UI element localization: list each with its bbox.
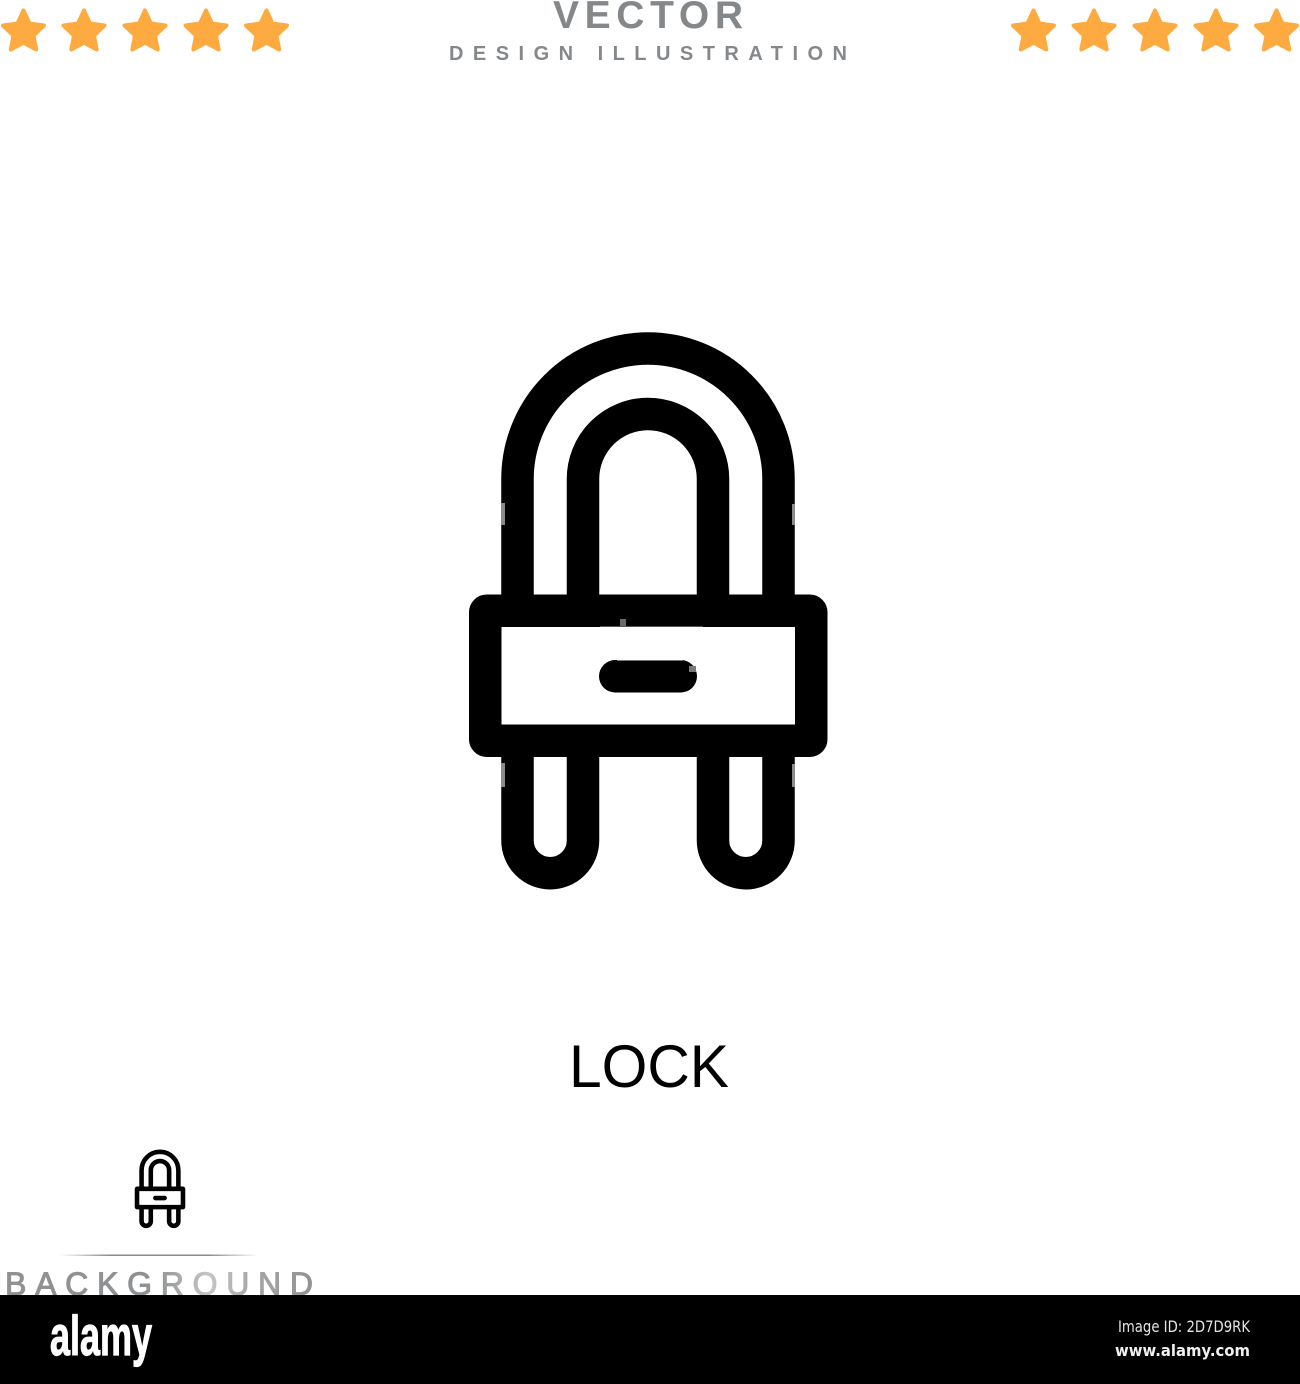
subheading: design illustration: DESIGN ILLUSTRATION bbox=[449, 43, 847, 65]
lock keyhole slot bbox=[599, 660, 697, 692]
divider line under thumbnail bbox=[60, 1254, 258, 1256]
lock inner shackle bbox=[583, 414, 713, 610]
label: background: BACKGROUND bbox=[5, 1266, 313, 1302]
image id: Image ID: 2D7D9RK bbox=[1118, 1317, 1250, 1336]
watermark logo: alamy: alamy bbox=[50, 1304, 152, 1367]
label: lock: LOCK bbox=[569, 1033, 729, 1100]
icon: small lock thumbnail bbox=[137, 1152, 183, 1226]
footer band bbox=[0, 1295, 1300, 1384]
lock body bbox=[485, 611, 811, 741]
left star rating bbox=[3, 10, 287, 50]
website: www.alamy.com bbox=[1115, 1341, 1250, 1360]
icon: large lock bbox=[485, 348, 811, 873]
lock outer shackle bbox=[518, 348, 778, 610]
right star rating bbox=[1013, 10, 1297, 50]
lock left leg bbox=[518, 741, 583, 873]
lock right leg bbox=[713, 741, 778, 873]
watermark traces on lock bbox=[501, 503, 795, 787]
